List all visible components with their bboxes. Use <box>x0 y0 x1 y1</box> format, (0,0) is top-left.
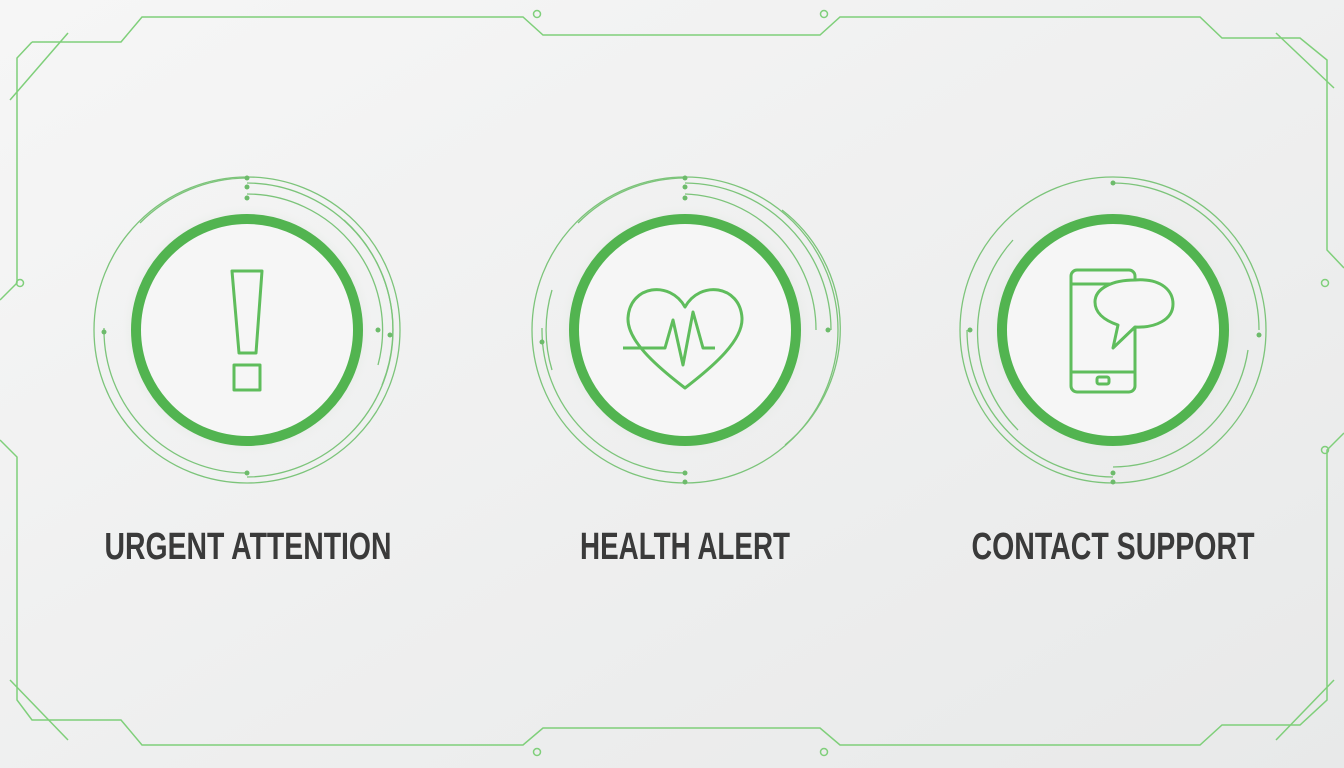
panel: urgent attention <box>94 176 400 483</box>
panel: health alert <box>532 176 840 484</box>
label: health alert: HEALTH ALERT <box>580 526 790 568</box>
label: urgent attention: URGENT ATTENTION <box>104 526 392 568</box>
panel: contact support <box>960 177 1266 484</box>
icon: phone with chat bubble <box>1071 270 1173 392</box>
icon: exclamation <box>232 271 262 390</box>
icon: heart with pulse <box>623 290 742 388</box>
label: contact support: CONTACT SUPPORT <box>972 526 1254 568</box>
